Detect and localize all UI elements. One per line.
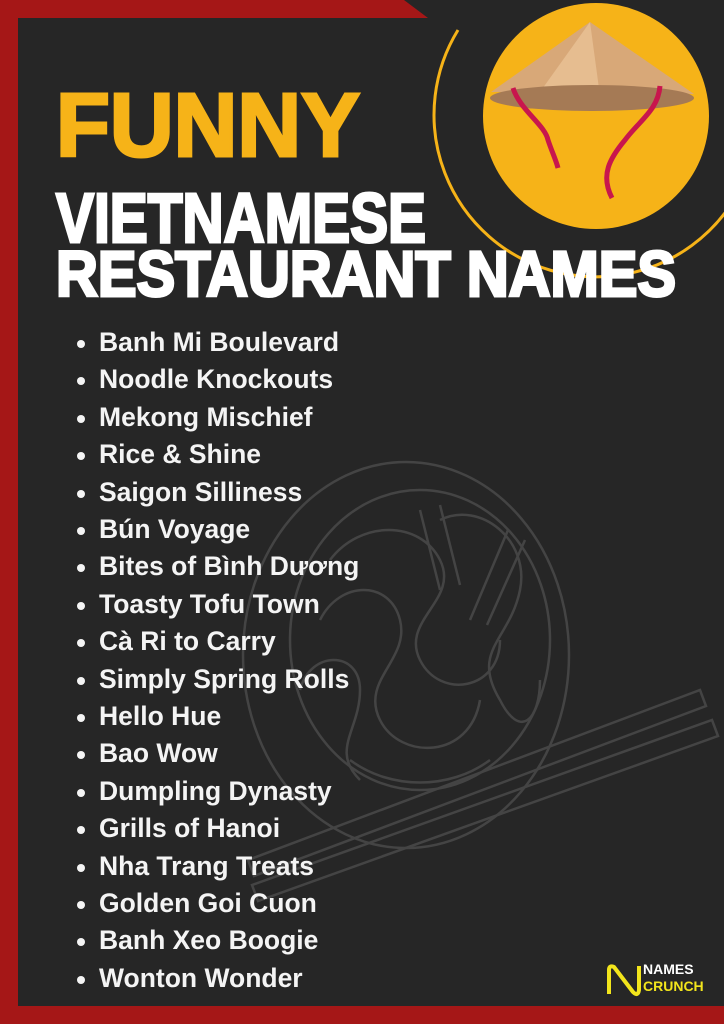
list of names: Nha Trang Treats (99, 851, 314, 881)
list of names: Simply Spring Rolls (99, 664, 349, 694)
list of names: Hello Hue (99, 701, 221, 731)
illustration: noodle bowl line art (243, 462, 718, 901)
list of names (77, 327, 359, 993)
list of names: Toasty Tofu Town (99, 589, 320, 619)
outer decorative arc (434, 30, 724, 277)
list of names: Bún Voyage (99, 514, 250, 544)
list of names: Bao Wow (99, 738, 218, 768)
title: FUNNY (56, 76, 360, 176)
list of names: Noodle Knockouts (99, 364, 333, 394)
list of names: Rice & Shine (99, 439, 261, 469)
icon: conical hat (490, 22, 694, 198)
logo: names crunch: CRUNCH (643, 978, 704, 994)
title (54, 76, 676, 310)
list of names: Cà Ri to Carry (99, 626, 276, 656)
yellow circle with hat icon (483, 3, 709, 229)
list of names: Mekong Mischief (99, 402, 313, 432)
list of names: Banh Mi Boulevard (99, 327, 339, 357)
logo: names crunch: NAMES (643, 961, 694, 977)
list of names: Wonton Wonder (99, 963, 303, 993)
list of names: Golden Goi Cuon (99, 888, 317, 918)
title: VIETNAMESE (56, 179, 426, 257)
list of names: Grills of Hanoi (99, 813, 280, 843)
list of names: Saigon Silliness (99, 477, 302, 507)
title: RESTAURANT NAMES (56, 238, 676, 310)
list of names: Banh Xeo Boogie (99, 925, 318, 955)
list of names: Bites of Bình Dương (99, 551, 359, 581)
list of names: Dumpling Dynasty (99, 776, 332, 806)
logo: names crunch (607, 961, 704, 996)
